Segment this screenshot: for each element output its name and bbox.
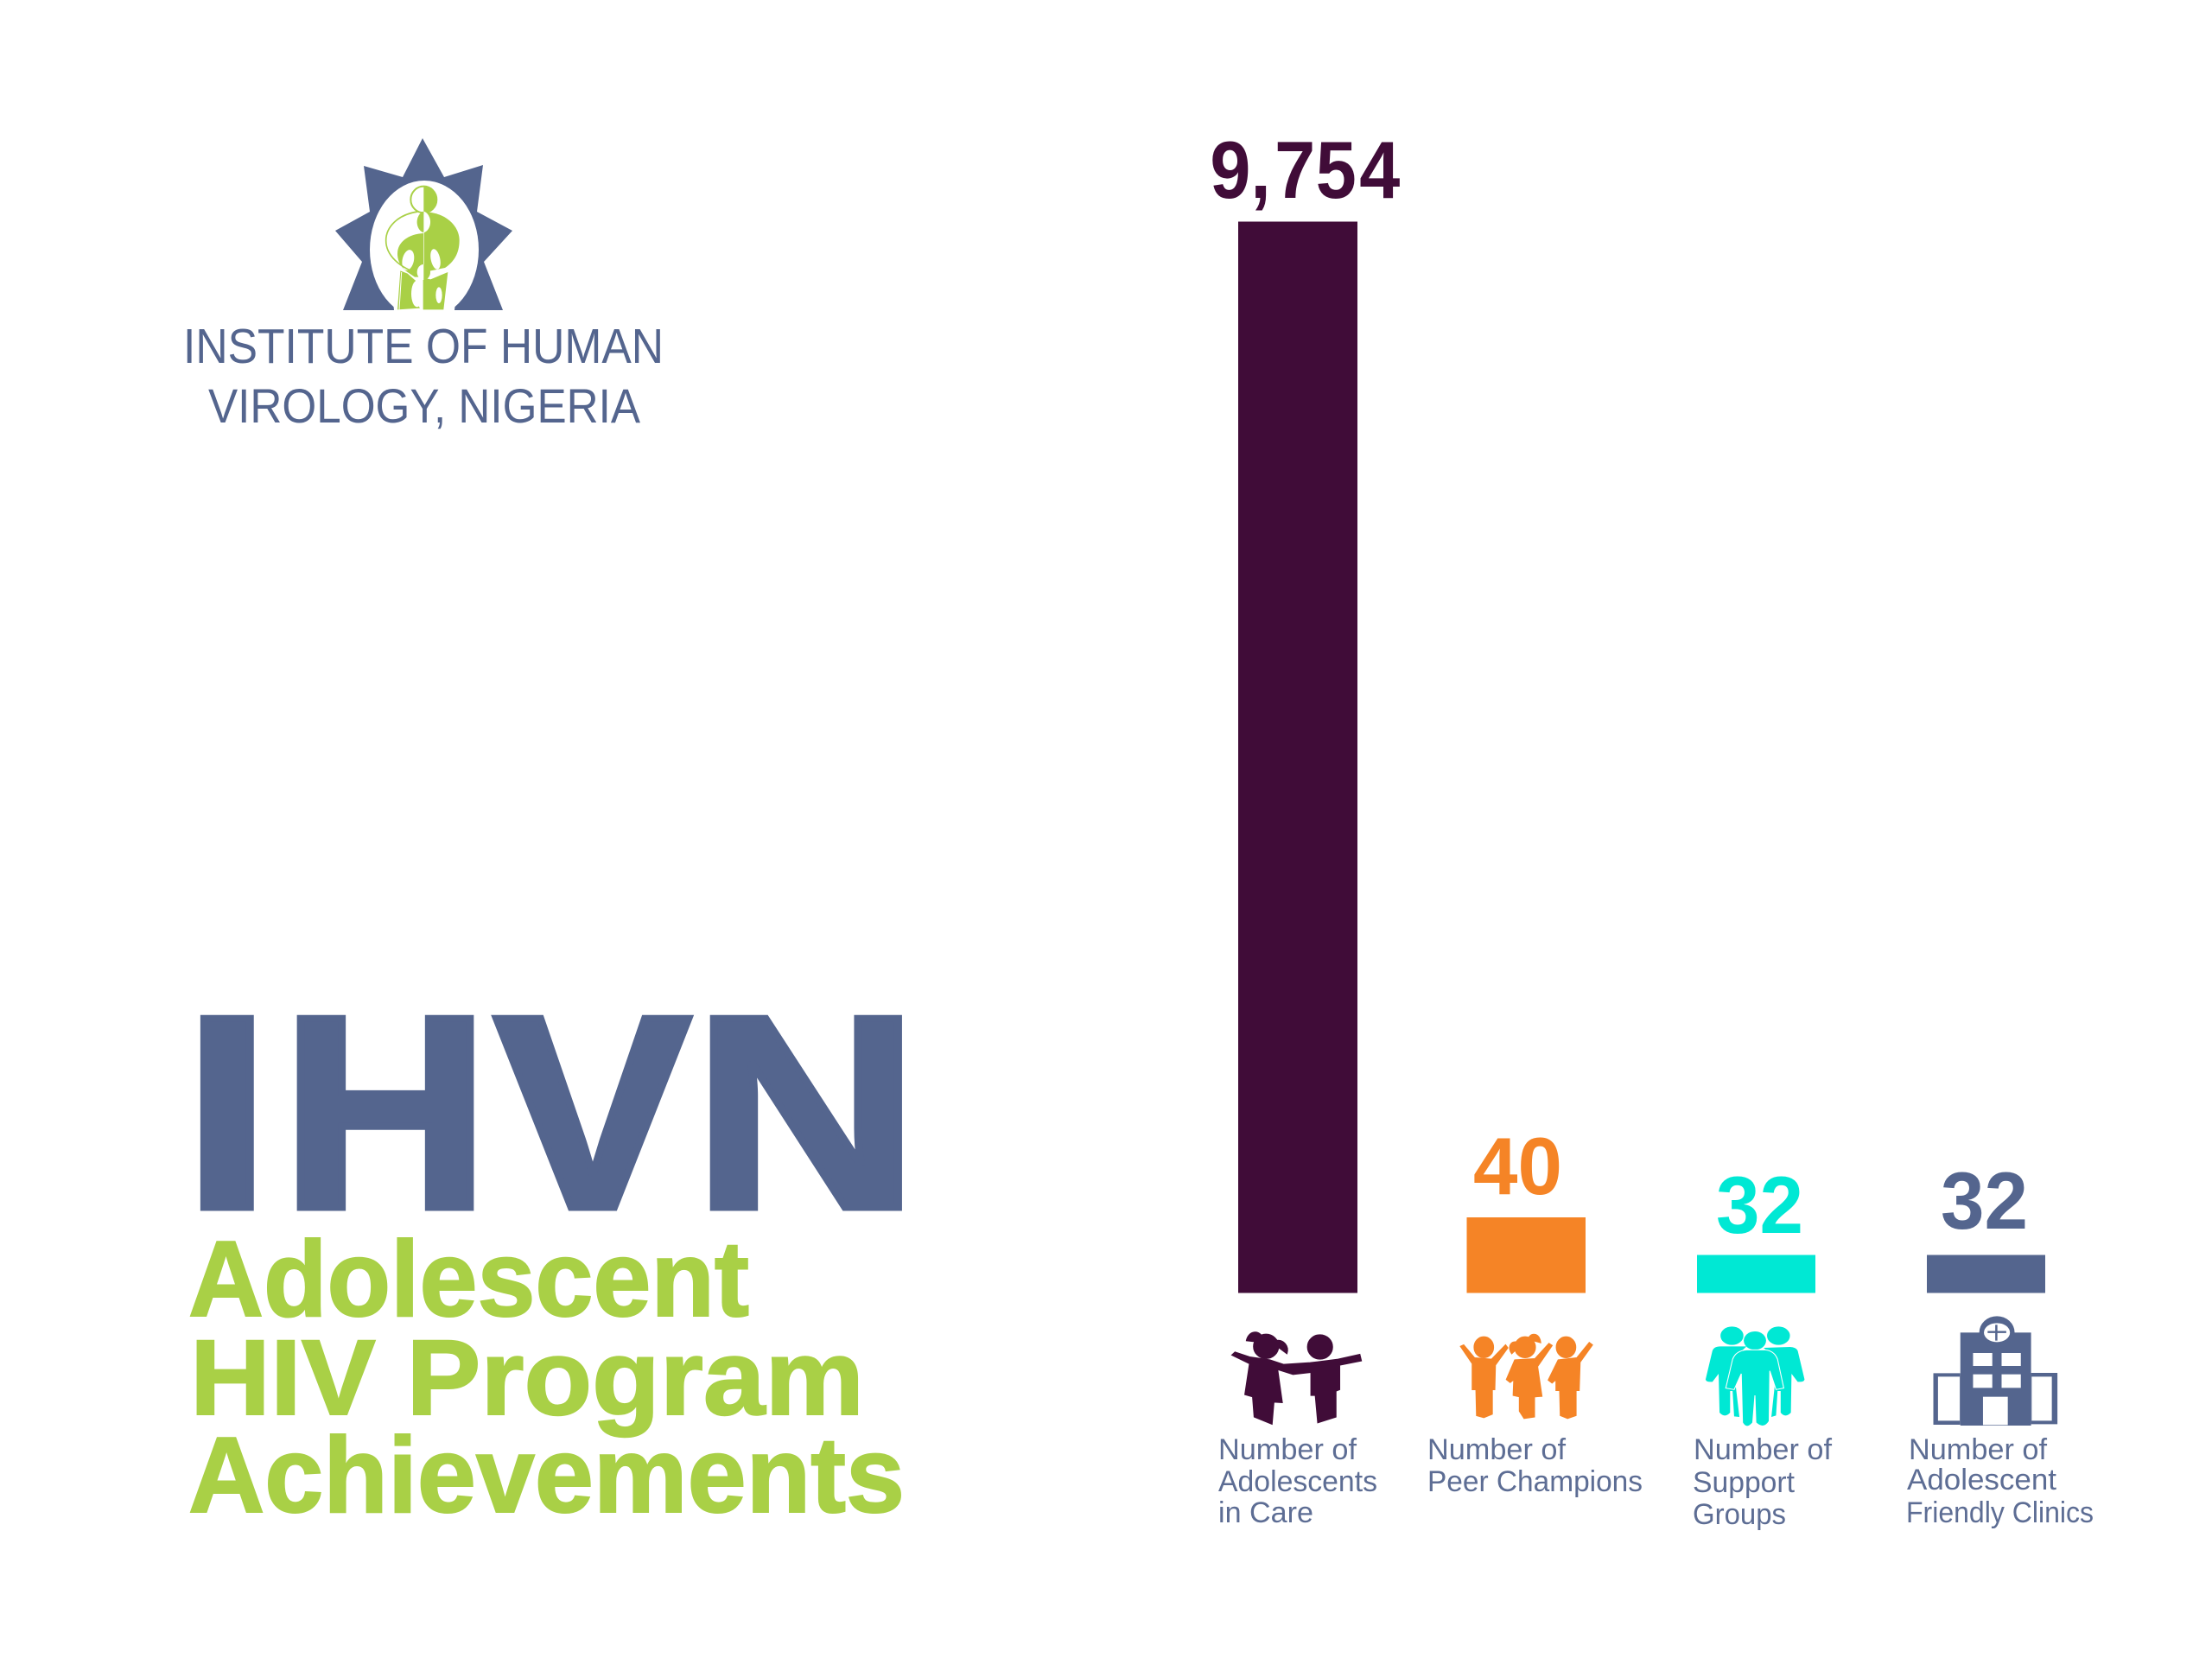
label: Adolescent — [1907, 1464, 2057, 1496]
bar: adolescent friendly clinics — [1927, 1255, 2045, 1293]
value: 9,754: 9,754 — [1210, 124, 1401, 215]
subtitle: Adolescent HIV Program Achievements: Achievements — [188, 1416, 905, 1535]
label — [1693, 1433, 1833, 1531]
column: peer champions — [1427, 1121, 1643, 1498]
column: adolescents in care — [1210, 124, 1401, 1529]
icon: two children — [1232, 1332, 1361, 1424]
title: IHVN: V — [494, 959, 692, 1266]
label: Adolescents — [1218, 1465, 1377, 1498]
label — [1427, 1433, 1643, 1498]
title: IHVN — [183, 959, 919, 1267]
label: Peer Champions — [1427, 1465, 1643, 1498]
icon: star emblem — [335, 138, 512, 319]
label — [1906, 1433, 2094, 1529]
label: in Care — [1218, 1496, 1313, 1529]
label: Number of — [1694, 1433, 1833, 1466]
logo: Institute of Human Virology, Nigeria — [183, 138, 664, 433]
logo text: VIROLOGY, NIGERIA — [208, 378, 641, 433]
label — [1218, 1433, 1377, 1529]
icon: three children — [1460, 1334, 1592, 1419]
icon: group of people — [1706, 1326, 1804, 1426]
column: support groups — [1693, 1159, 1833, 1531]
label: Groups — [1693, 1498, 1786, 1531]
bar: support groups — [1697, 1255, 1815, 1293]
value: 40: 40 — [1473, 1121, 1562, 1211]
subtitle: Adolescent HIV Program Achievements: Adolescent — [188, 1220, 749, 1339]
label: Number of — [1218, 1433, 1357, 1466]
value: 32: 32 — [1941, 1155, 2028, 1246]
label: Number of — [1427, 1433, 1567, 1466]
label: Support — [1693, 1466, 1796, 1499]
column: adolescent friendly clinics — [1906, 1155, 2094, 1529]
icon: hospital — [1934, 1316, 2057, 1426]
title: IHVN: H — [282, 960, 490, 1267]
bar: adolescents in care — [1238, 221, 1357, 1293]
value: 32: 32 — [1716, 1159, 1803, 1250]
title: IHVN: I — [183, 959, 271, 1266]
subtitle: Adolescent HIV Program Achievements — [188, 1220, 905, 1535]
logo text — [183, 319, 664, 433]
bar: peer champions — [1467, 1217, 1586, 1293]
logo text: INSTITUTE OF HUMAN — [183, 319, 664, 374]
title: IHVN: N — [693, 959, 919, 1267]
subtitle: Adolescent HIV Program Achievements: HIV Program — [190, 1318, 864, 1438]
label: Friendly Clinics — [1906, 1496, 2094, 1529]
label: Number of — [1909, 1433, 2048, 1466]
